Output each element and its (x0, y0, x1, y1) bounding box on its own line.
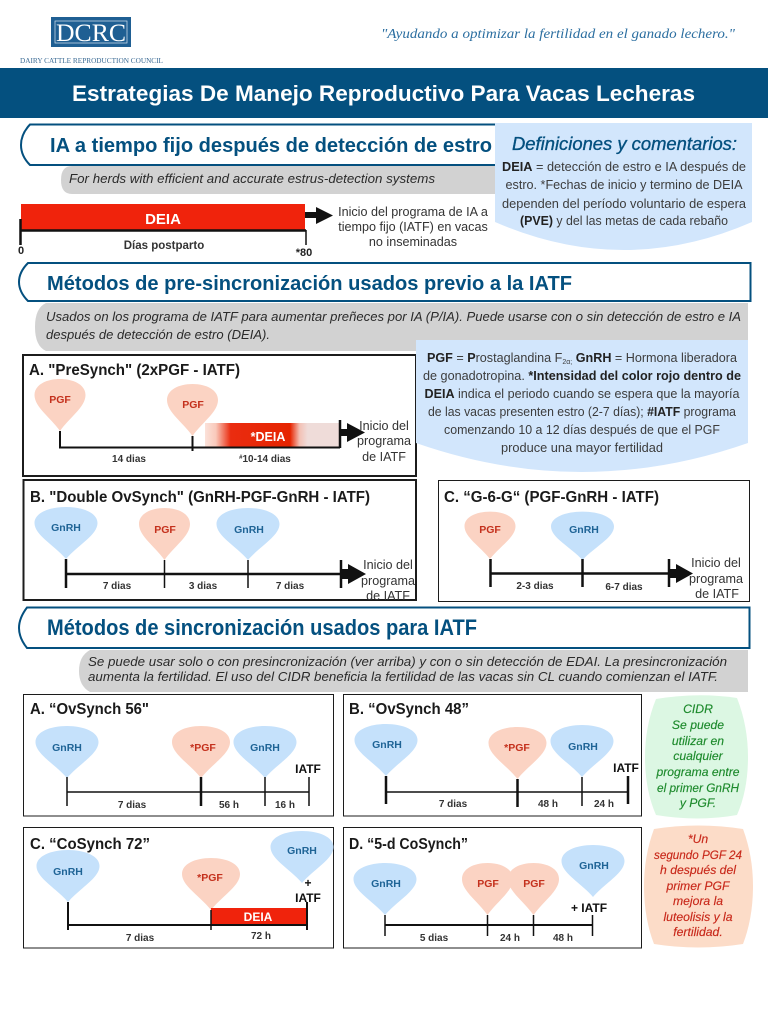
timeline: IATF (613, 761, 639, 775)
DEIA gradient bar (205, 423, 340, 447)
grey intro strip (35, 303, 748, 351)
panel: C G-6-G (438, 480, 750, 602)
panel: PGF note: DEIA indica el periodo cuando se espera que la mayoría (424, 387, 740, 401)
hormone markers: GnRH (579, 860, 609, 872)
panel: PGF note: de las vacas presenten estro (2-7 días); #IATF programa (428, 405, 736, 419)
DEIA timeline: Días postparto (124, 240, 204, 252)
timeline: 56 h (219, 800, 239, 811)
timeline: 2-3 dias (516, 581, 554, 592)
grey intro strip: Usados on los programa de IATF para aumentar preñeces por IA (P/IA). Puede usarse con o sin detección de estro e IA (46, 310, 741, 324)
timeline: 14 dias (112, 454, 146, 465)
text: inicio: Inicio del (363, 558, 413, 572)
grey intro strip: Se puede usar solo o con presincronización (ver arriba) y con o sin detección de EDAI. La presincronización (88, 654, 727, 669)
hormone markers (36, 831, 334, 910)
panel: definiciones y comentarios: (PVE) y del las metas de cada rebaño (520, 214, 728, 228)
timeline: 48 h (553, 933, 573, 944)
panel: CIDR note: utilizar en (672, 734, 724, 748)
PGF markers: PGF (49, 394, 71, 406)
timeline: IATF (295, 891, 321, 905)
timeline: # (239, 455, 243, 461)
timeline: 3 dias (189, 581, 218, 592)
logo caption: DAIRY CATTLE REPRODUCTION COUNCIL (20, 56, 163, 65)
hormone markers: PGF (154, 524, 176, 536)
timeline: 16 h (275, 800, 295, 811)
panel: pre-sincronización heading and intro (19, 263, 750, 351)
PGF markers: PGF (182, 399, 204, 411)
hormone markers: GnRH (250, 742, 280, 754)
hormone markers: GnRH (51, 522, 81, 534)
DEIA timeline (18, 204, 333, 259)
panel: D 5-d CoSynch: D. “5-d CoSynch” (349, 836, 468, 853)
hormone markers: GnRH (371, 878, 401, 890)
timeline: 7 dias (103, 581, 132, 592)
panel: segundo PGF note (644, 826, 753, 948)
timeline: 6-7 dias (605, 582, 643, 593)
grey intro strip: aumenta la fertilidad. El uso del CIDR beneficia la fertilidad de las vacas sin CL cuando comienzan el IATF. (88, 669, 718, 684)
hormone markers (464, 512, 614, 560)
text: inicio: Inicio del (359, 419, 409, 433)
panel: PGF note: comenzando 10 a 12 días después de que el PGF (444, 423, 720, 437)
panel: A PreSynch: A. "PreSynch" (2xPGF - IATF) (29, 362, 240, 379)
panel: CIDR note: el primer GnRH (657, 781, 739, 795)
timeline: 24 h (500, 933, 520, 944)
panel: B Double OvSynch (24, 480, 416, 603)
timeline (67, 762, 321, 811)
panel: B OvSynch 48 (344, 694, 642, 816)
panel: IA a tiempo fijo (18, 124, 497, 259)
panel: segundo PGF note: primer PGF (666, 879, 731, 893)
section heading: Métodos de pre-sincronización usados previo a la IATF (47, 272, 572, 295)
panel: C CoSynch 72: C. “CoSynch 72” (30, 836, 150, 853)
DEIA timeline: 0 (18, 245, 24, 257)
text: inicio del programa (338, 205, 488, 249)
panel: CIDR note: CIDR (683, 702, 713, 716)
timeline: 7 dias (126, 933, 155, 944)
timeline: 5 dias (420, 933, 449, 944)
panel: B OvSynch 48: B. “OvSynch 48” (349, 701, 469, 718)
timeline (68, 876, 321, 944)
panel: PGF note (416, 340, 748, 472)
text: inicio: de IATF (366, 589, 410, 603)
panel: PGF note: = Hormona liberadora (615, 351, 737, 365)
section heading (19, 263, 750, 301)
panel: definiciones y comentarios (495, 123, 752, 250)
hormone markers: PGF (523, 878, 545, 890)
text: inicio: de IATF (362, 450, 406, 464)
panel: CIDR note: cualquier (673, 749, 724, 763)
hormone markers: GnRH (568, 741, 598, 753)
panel: CIDR note: Se puede (672, 718, 724, 732)
panel: CIDR note (645, 695, 748, 818)
hormone markers: GnRH (569, 524, 599, 536)
timeline: 7 dias (439, 799, 468, 810)
panel: segundo PGF note: luteolisis y la (663, 910, 733, 924)
DEIA bar (211, 908, 307, 925)
panel: PGF note: de gonadotropina. *Intensidad del color rojo dentro de (423, 369, 741, 383)
panel: CIDR note: programa entre (656, 765, 740, 779)
grey intro strip (79, 650, 748, 692)
text: inicio: Inicio del (691, 556, 741, 570)
hormone markers (354, 724, 614, 779)
panel: C G-6-G: C. “G-6-G“ (PGF-GnRH - IATF) (444, 489, 659, 506)
panel: segundo PGF note: fertilidad. (673, 925, 723, 939)
text: inicio (361, 558, 415, 603)
panel: segundo PGF note: h después del (660, 863, 736, 877)
hormone markers: *PGF (504, 742, 530, 754)
panel: B Double OvSynch: B. "Double OvSynch" (GnRH-PGF-GnRH - IATF) (30, 489, 370, 506)
text: inicio del programa: Inicio del programa de IA a (338, 205, 488, 219)
section heading (21, 124, 497, 165)
panel: segundo PGF note: segundo PGF 24 (654, 848, 742, 862)
grey subtitle strip (61, 166, 495, 194)
PGF markers (34, 379, 218, 436)
panel: segundo PGF note: mejora la (673, 894, 723, 908)
timeline: 24 h (594, 799, 614, 810)
hormone markers: GnRH (52, 742, 82, 754)
section heading: IA a tiempo fijo después de detección de estro (50, 134, 492, 157)
text: inicio del programa: no inseminadas (369, 235, 457, 249)
hormone markers: PGF (477, 878, 499, 890)
grey intro strip: después de detección de estro (DEIA). (46, 328, 270, 342)
panel: C CoSynch 72 (24, 828, 334, 948)
section heading (19, 608, 750, 648)
timeline (490, 559, 693, 593)
panel: A OvSynch 56 (24, 694, 334, 816)
text: inicio del programa: tiempo fijo (IATF) en vacas (338, 220, 488, 234)
panel: D 5-d CoSynch (344, 828, 642, 948)
hormone markers: *PGF (197, 872, 223, 884)
hormone markers: GnRH (287, 845, 317, 857)
panel: definiciones y comentarios: Definiciones y comentarios: (512, 133, 737, 154)
timeline (386, 761, 639, 810)
hormone markers: PGF (479, 524, 501, 536)
panel: PGF note: GnRH (576, 351, 611, 365)
DEIA gradient bar: *DEIA (251, 430, 285, 444)
hormone markers: GnRH (372, 739, 402, 751)
hormone markers (34, 507, 280, 560)
hormone markers: *PGF (190, 742, 216, 754)
logo: DCRC: DCRC (56, 20, 126, 47)
text: inicio: programa (361, 574, 415, 588)
timeline: + IATF (571, 901, 607, 915)
timeline: 48 h (538, 799, 558, 810)
text: inicio: programa (357, 434, 411, 448)
timeline: 7 dias (118, 800, 147, 811)
timeline: 7 dias (276, 581, 305, 592)
hormone markers: GnRH (53, 866, 83, 878)
panel: sincronización heading and intro (19, 608, 750, 692)
panel: PGF note: 2α; (562, 359, 572, 366)
title banner: Estrategias De Manejo Reproductivo Para Vacas Lecheras (72, 81, 695, 106)
panel: A PreSynch (23, 355, 416, 476)
text: inicio (689, 556, 743, 601)
grey subtitle strip: For herds with efficient and accurate estrus-detection systems (69, 172, 436, 186)
tagline: "Ayudando a optimizar la fertilidad en el ganado lechero." (381, 27, 735, 42)
hormone markers (36, 726, 296, 778)
text: inicio (357, 419, 411, 464)
title banner (0, 68, 768, 118)
panel: segundo PGF note: *Un (688, 832, 708, 846)
section heading: Métodos de sincronización usados para IATF (47, 615, 477, 640)
panel: PGF note: PGF = Prostaglandina F (427, 351, 562, 365)
timeline: 10-14 dias (242, 454, 291, 465)
timeline: + (304, 876, 312, 890)
timeline (60, 420, 365, 465)
panel: CIDR note: y PGF. (679, 796, 716, 810)
panel: A OvSynch 56: A. “OvSynch 56" (30, 701, 149, 718)
text: inicio: de IATF (695, 587, 739, 601)
hormone markers: GnRH (234, 524, 264, 536)
DEIA timeline: *80 (296, 247, 312, 259)
timeline: IATF (295, 762, 321, 776)
timeline: 72 h (251, 931, 271, 942)
text: inicio: programa (689, 572, 743, 586)
timeline (385, 901, 607, 944)
DEIA timeline: DEIA (145, 211, 181, 228)
timeline (66, 559, 366, 592)
panel: definiciones y comentarios: DEIA = detección de estro e IA después de (502, 160, 746, 174)
DEIA bar: DEIA (244, 910, 273, 924)
panel: definiciones y comentarios: estro. *Fechas de inicio y termino de DEIA (506, 178, 743, 192)
panel: definiciones y comentarios: dependen del período voluntario de espera (502, 197, 746, 211)
panel: PGF note: produce una mayor fertilidad (501, 441, 663, 455)
hormone markers (354, 845, 624, 915)
